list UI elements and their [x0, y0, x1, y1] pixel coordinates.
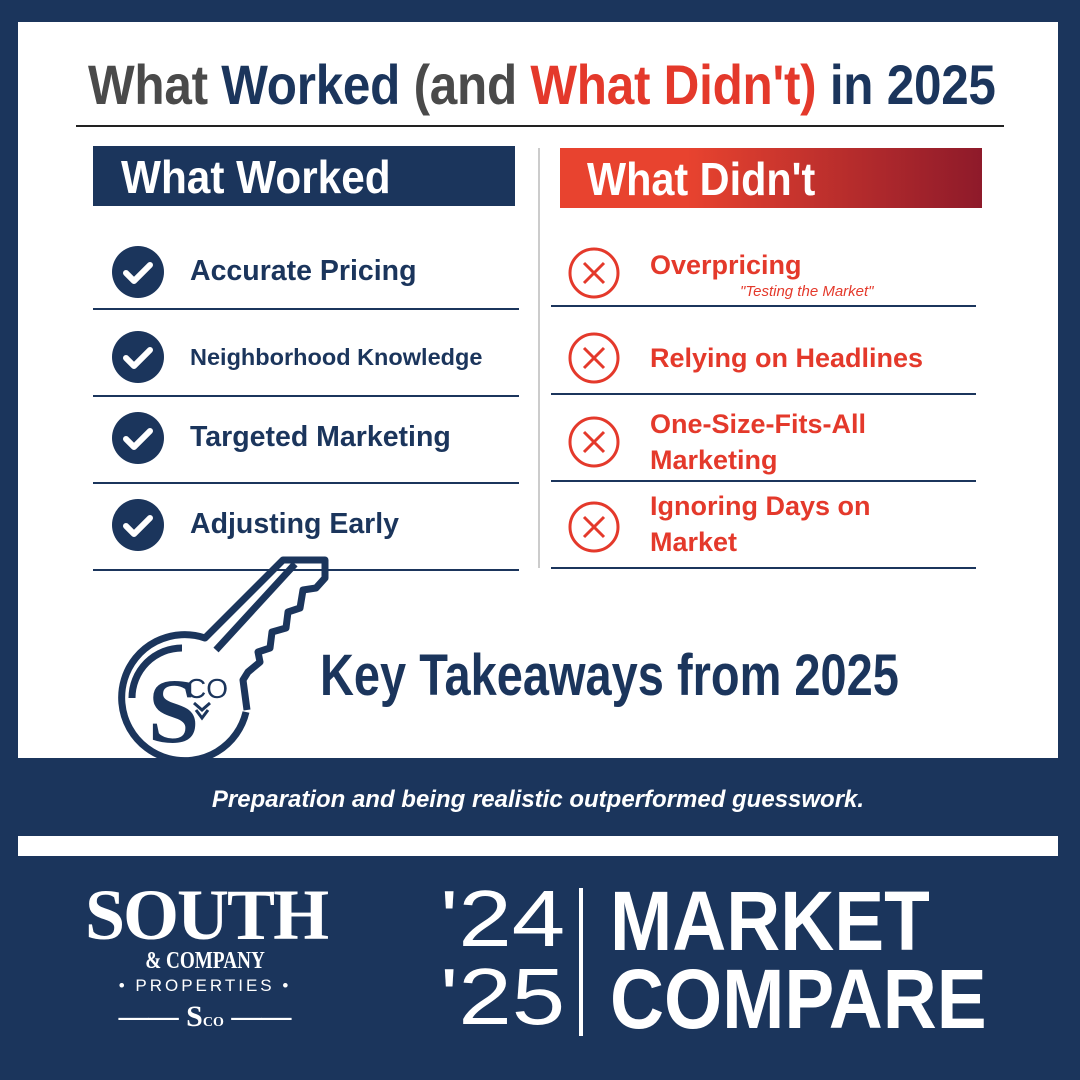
- logo: south & company: [85, 875, 328, 1033]
- panel: what worked header: [93, 146, 515, 206]
- icon: key: [118, 556, 328, 760]
- logo: south & company: • PROPERTIES •: [119, 976, 291, 995]
- text: Overpricing: [650, 250, 802, 280]
- icon: key: CO: [186, 673, 228, 704]
- text: "Testing the Market": [740, 283, 874, 300]
- text: Ignoring Days on: [650, 491, 871, 521]
- text: Marketing: [650, 445, 778, 475]
- heading: key takeaways: Key Takeaways from 2025: [320, 643, 899, 708]
- heading: market compare: [610, 874, 987, 1046]
- text: Market: [650, 527, 737, 557]
- text: Neighborhood Knowledge: [190, 344, 482, 370]
- title: What Worked (and What Didn't) in 2025: [88, 53, 996, 116]
- numbers: '24 '25: '25: [440, 952, 565, 1041]
- white panel: [18, 22, 1058, 758]
- numbers: '24 '25: '24: [440, 874, 565, 963]
- tagline: Preparation and being realistic outperformed guesswork.: [212, 786, 864, 813]
- heading: market compare: MARKET: [610, 874, 930, 968]
- text: Targeted Marketing: [190, 421, 451, 453]
- logo: south & company: ―― SCO ――: [119, 1000, 291, 1033]
- panel: what worked header: What Worked: [121, 151, 391, 203]
- logo: south & company: SOUTH: [85, 875, 327, 955]
- text: Relying on Headlines: [650, 343, 923, 373]
- text: One-Size-Fits-All: [650, 409, 866, 439]
- panel: what didn't header: [560, 148, 982, 208]
- text: Accurate Pricing: [190, 255, 416, 287]
- list: what worked: [112, 246, 164, 551]
- logo: south & company: & COMPANY: [145, 948, 265, 974]
- icon: key: S: [148, 660, 199, 760]
- list: what didn't: [568, 248, 620, 552]
- panel: what didn't header: What Didn't: [587, 153, 815, 205]
- numbers: '24 '25: [440, 874, 565, 1041]
- text: Adjusting Early: [190, 508, 399, 540]
- heading: market compare: COMPARE: [610, 952, 987, 1046]
